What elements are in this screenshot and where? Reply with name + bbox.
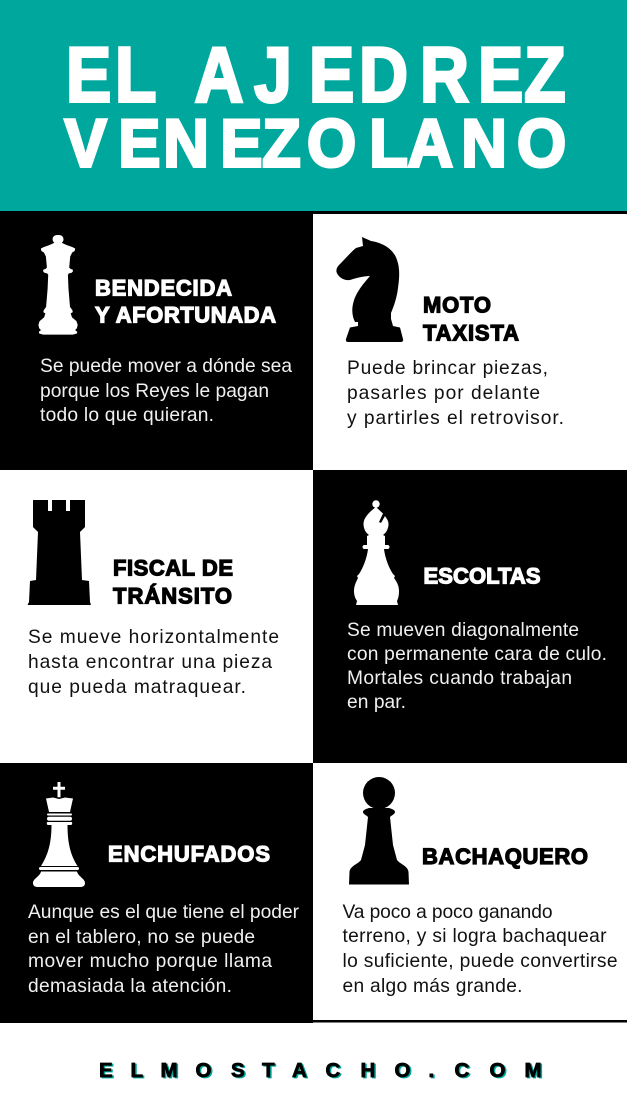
heading (423, 292, 519, 346)
heading: TRÁNSITO (113, 584, 232, 608)
description (342, 902, 618, 997)
description (40, 356, 292, 426)
description: hasta encontrar una pieza (28, 652, 272, 673)
description: Va poco a poco ganando (342, 902, 552, 923)
heading: BENDECIDA (95, 276, 232, 300)
description: que pueda matraquear. (28, 677, 246, 698)
icon: knight (336, 237, 403, 342)
description: todo lo que quieran. (40, 405, 214, 426)
description: porque los Reyes le pagan (40, 381, 269, 402)
description (28, 902, 300, 997)
description: Puede brincar piezas, (347, 358, 548, 379)
description: pasarles por delante (347, 383, 540, 404)
icon: queen (38, 235, 78, 335)
description (347, 620, 607, 713)
icon: king (33, 782, 85, 887)
panel: knight, moto taxista (313, 211, 627, 470)
heading: TAXISTA (423, 320, 519, 346)
description: demasiada la atención. (28, 976, 232, 997)
heading: ENCHUFADOS (108, 842, 270, 866)
footer website: ELMOSTACHO.COM (99, 1059, 542, 1082)
panel: queen, bendecida y afortunada (0, 211, 313, 470)
title (65, 32, 566, 181)
description: Mortales cuando trabajan (347, 668, 572, 689)
description (28, 627, 279, 698)
heading: FISCAL DE (113, 556, 233, 580)
panel: king, enchufados (0, 763, 313, 1023)
panel: pawn, bachaquero (313, 763, 627, 1023)
footer website: ELMOSTACHO.COM (100, 1060, 543, 1083)
icon: pawn (349, 777, 409, 884)
header banner with title (0, 0, 627, 211)
description: Aunque es el que tiene el poder (28, 902, 300, 923)
heading: MOTO (423, 292, 491, 318)
description: en el tablero, no se puede (28, 927, 255, 948)
description: Se mueve horizontalmente (28, 627, 279, 648)
heading: ESCOLTAS (424, 564, 540, 588)
description: con permanente cara de culo. (347, 644, 607, 665)
title: VENEZOLANO (65, 105, 566, 181)
icon: bishop (354, 500, 399, 605)
heading: Y AFORTUNADA (95, 302, 276, 328)
description: Se mueven diagonalmente (347, 620, 579, 641)
heading: BACHAQUERO (422, 844, 588, 869)
description (347, 358, 564, 429)
heading (113, 556, 233, 608)
description: terreno, y si logra bachaquear (342, 926, 607, 947)
description: lo suficiente, puede convertirse (342, 951, 618, 972)
heading (95, 276, 276, 328)
title: EL AJEDREZ (66, 32, 566, 119)
panel: rook, fiscal de transito (0, 470, 313, 763)
panel: bishop, escoltas (313, 470, 627, 763)
description: mover mucho porque llama (28, 951, 272, 972)
description: y partirles el retrovisor. (347, 408, 564, 429)
description: Se puede mover a dónde sea (40, 356, 292, 377)
description: en algo más grande. (342, 976, 522, 997)
icon: rook (28, 500, 91, 605)
description: en par. (347, 692, 406, 713)
